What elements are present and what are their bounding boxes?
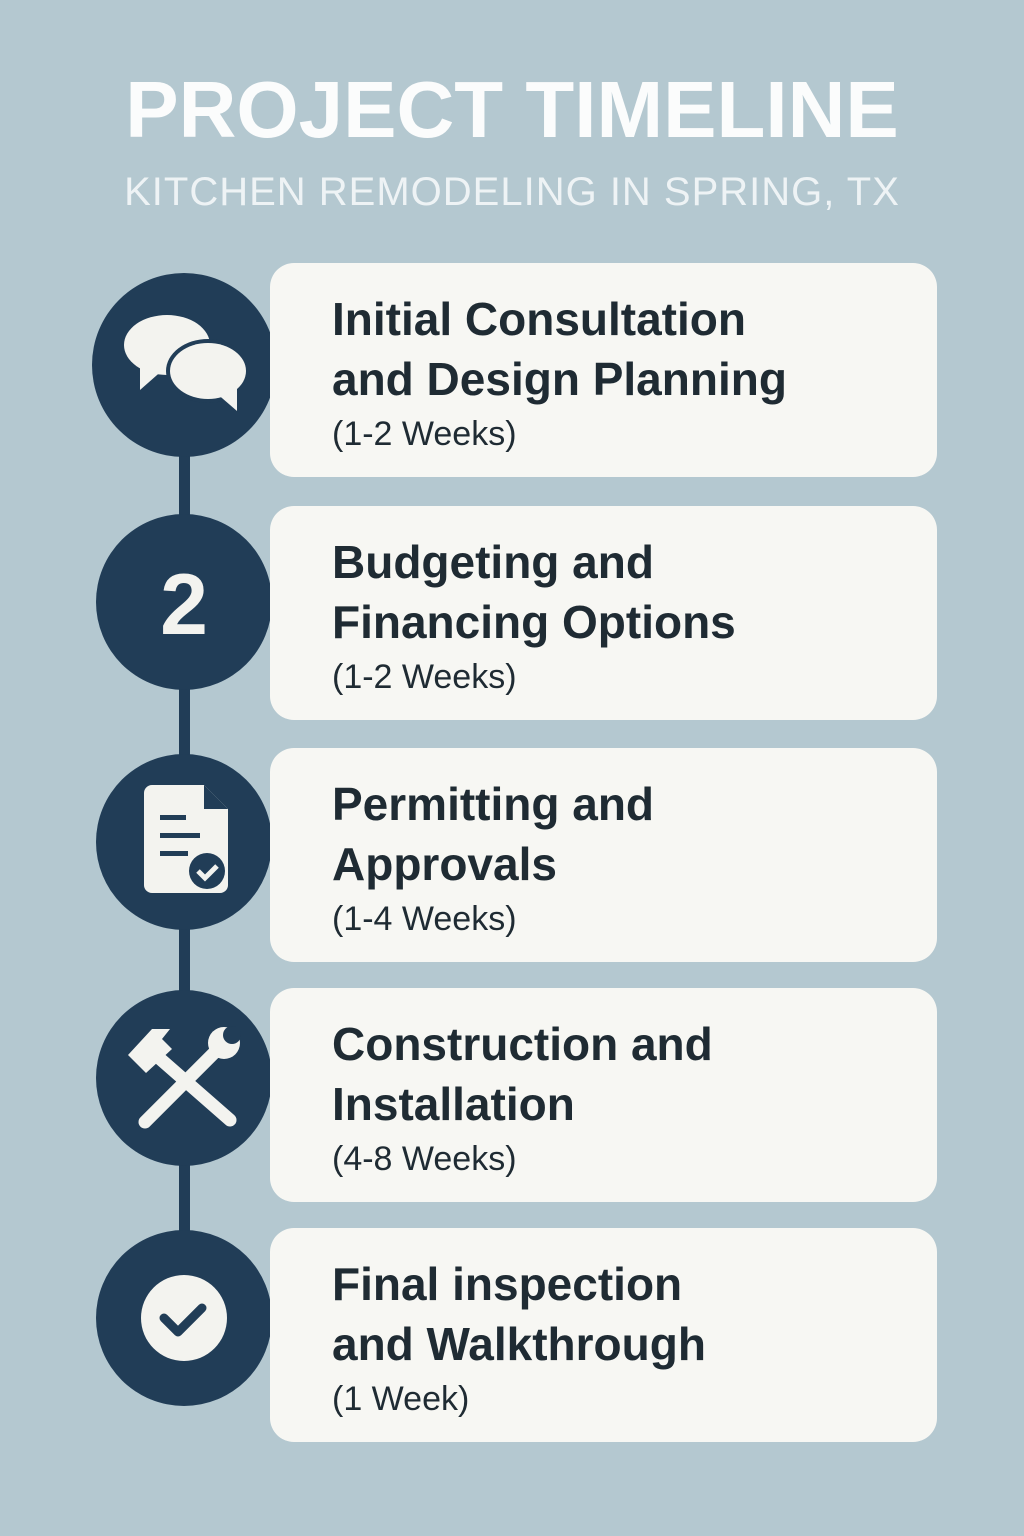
card 2: (1-2 Weeks)	[332, 658, 517, 696]
icon: hammer and wrench	[96, 990, 272, 1166]
icon: number 2	[96, 514, 272, 690]
card 1: and Design Planning	[332, 353, 787, 405]
card 5: Final inspection	[332, 1258, 682, 1310]
connector line	[179, 360, 190, 1320]
subtitle: KITCHEN REMODELING IN SPRING, TX	[124, 170, 900, 214]
card 1	[270, 263, 937, 477]
card 1: Initial Consultation	[332, 293, 746, 345]
card 4	[270, 988, 937, 1202]
card 5: and Walkthrough	[332, 1318, 706, 1370]
icon: chat bubbles	[92, 273, 276, 457]
card 5: (1 Week)	[332, 1380, 469, 1418]
icon: number 2: 2	[160, 557, 208, 653]
icon: check circle	[96, 1230, 272, 1406]
card 2	[270, 506, 937, 720]
timeline column	[92, 273, 270, 1406]
icon: document check	[96, 754, 272, 930]
card 3: Approvals	[332, 838, 557, 890]
card 2: Budgeting and	[332, 536, 654, 588]
title: PROJECT TIMELINE	[125, 65, 899, 154]
card 3: Permitting and	[332, 778, 654, 830]
card 3	[270, 748, 937, 962]
card 4: Construction and	[332, 1018, 713, 1070]
card 5	[270, 1228, 937, 1442]
card 4: Installation	[332, 1078, 575, 1130]
card 2: Financing Options	[332, 596, 736, 648]
card 1: (1-2 Weeks)	[332, 415, 517, 453]
card 3: (1-4 Weeks)	[332, 900, 517, 938]
card 4: (4-8 Weeks)	[332, 1140, 517, 1178]
